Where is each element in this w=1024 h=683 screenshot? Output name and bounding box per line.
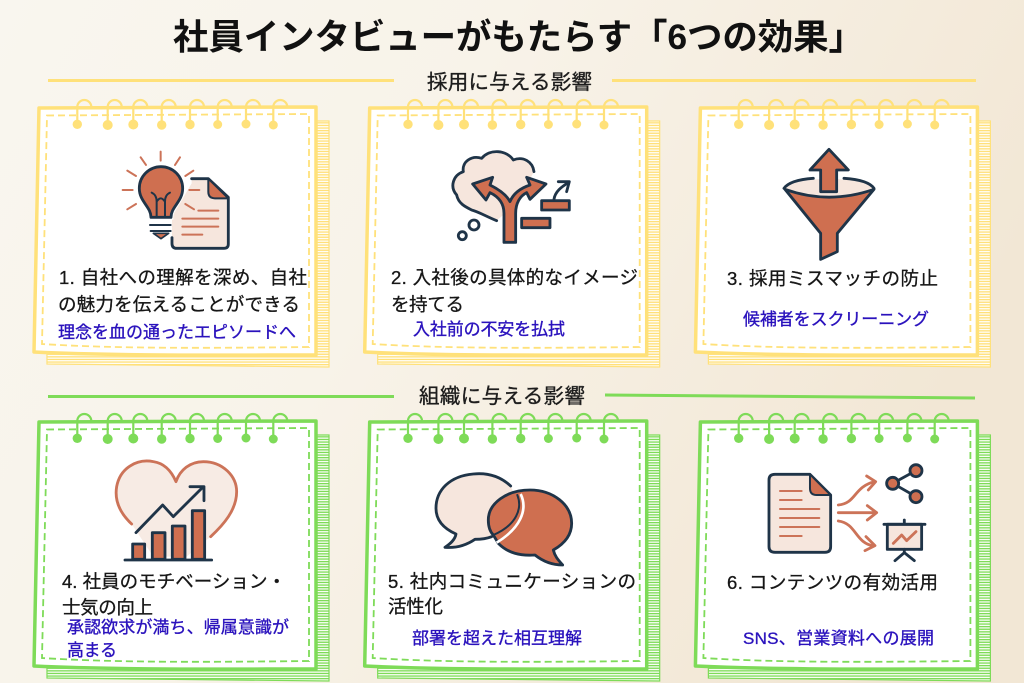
card 4 heading bbox=[62, 571, 286, 618]
card 5 heading: 5. 社内コミュニケーションの bbox=[388, 571, 636, 592]
card 3 heading: 3. 採用ミスマッチの防止 bbox=[727, 268, 938, 289]
card 1 subtext: 理念を血の通ったエピソードへ bbox=[58, 323, 296, 342]
card 4 subtext: 承認欲求が満ち、帰属意識が bbox=[67, 618, 289, 637]
card 1 heading bbox=[58, 267, 307, 315]
card 4 subtext bbox=[67, 618, 289, 660]
card 2 heading: を持てる bbox=[391, 294, 464, 315]
panel: card 3 bbox=[695, 100, 990, 367]
card 2 heading bbox=[391, 267, 638, 315]
panel: card 1 bbox=[34, 100, 329, 367]
title: 社員インタビューがもたらす「6つの効果」 bbox=[173, 17, 864, 57]
card 4 heading: 士気の向上 bbox=[62, 597, 153, 618]
icon: crossroads cloud and steps bbox=[453, 152, 569, 242]
card 6 subtext: SNS、営業資料への展開 bbox=[743, 629, 934, 648]
card 3 subtext: 候補者をスクリーニング bbox=[743, 310, 929, 329]
icon: funnel with arrow bbox=[784, 149, 874, 259]
card 2 subtext: 入社前の不安を払拭 bbox=[413, 320, 565, 339]
section header: recruiting impact: 採用に与える影響 bbox=[427, 71, 592, 94]
section header: organization impact bbox=[48, 385, 975, 408]
icon: heart with growth chart bbox=[116, 461, 237, 560]
card 5 subtext: 部署を超えた相互理解 bbox=[412, 629, 582, 648]
icon: light bulb and document bbox=[123, 152, 228, 248]
card 6 heading: 6. コンテンツの有効活用 bbox=[727, 572, 938, 593]
card 2 heading: 2. 入社後の具体的なイメージ bbox=[391, 267, 638, 288]
icon: speech bubbles bbox=[436, 474, 572, 565]
card 1 heading: の魅力を伝えることができる bbox=[58, 294, 300, 315]
card 1 heading: 1. 自社への理解を深め、自社 bbox=[59, 267, 307, 288]
card 4 heading: 4. 社員のモチベーション・ bbox=[62, 571, 286, 592]
panel: card 5 bbox=[365, 414, 660, 681]
card 5 heading bbox=[388, 571, 636, 617]
panel: card 6 bbox=[695, 414, 990, 681]
panel: card 2 bbox=[365, 100, 660, 367]
section header: organization impact: 組織に与える影響 bbox=[419, 385, 585, 408]
panel: card 4 bbox=[34, 414, 329, 681]
icon: document to share and presentation bbox=[769, 465, 925, 561]
card 4 subtext: 高まる bbox=[67, 641, 117, 660]
card 5 heading: 活性化 bbox=[388, 596, 443, 617]
